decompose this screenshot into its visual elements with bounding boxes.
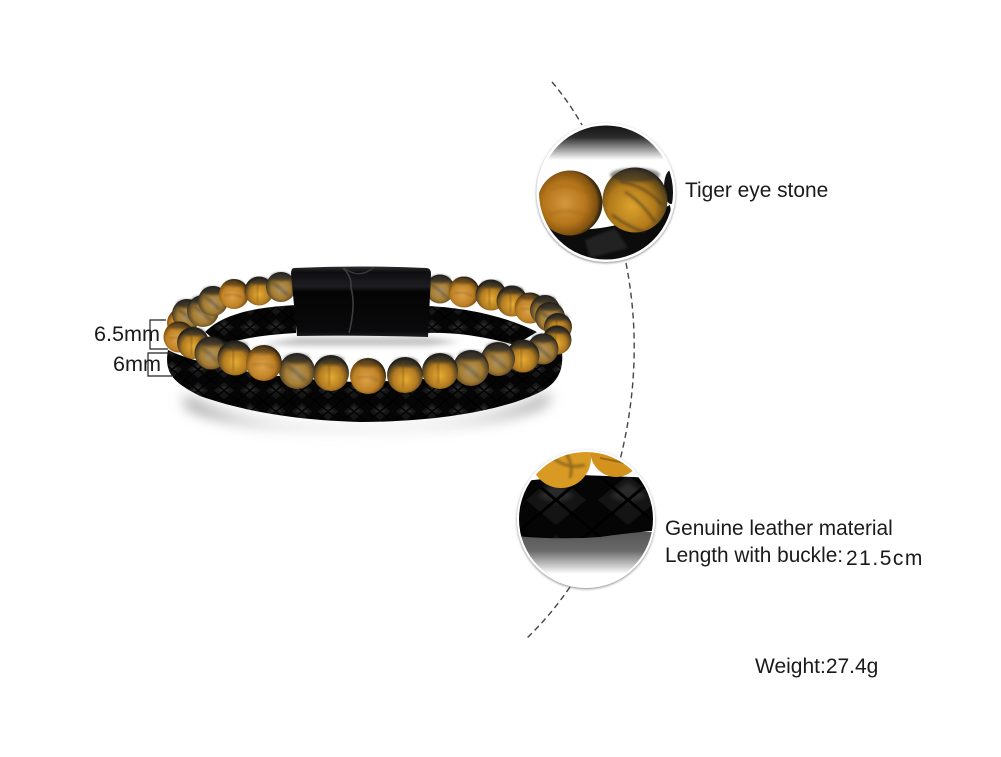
label: leather material and length: Genuine leather material bbox=[665, 517, 893, 540]
dashed arc connecting detail circles bbox=[527, 82, 634, 638]
label: 6mm: 6mm bbox=[113, 351, 161, 376]
label: tiger eye stone: Tiger eye stone bbox=[685, 179, 828, 202]
label: weight: Weight:27.4g bbox=[755, 655, 878, 678]
back row of tiger eye beads bbox=[167, 272, 572, 341]
strap shadow bbox=[185, 337, 550, 429]
label: leather material and length: Length with buckle: bbox=[665, 544, 843, 567]
bracelet photo bbox=[164, 266, 572, 429]
infographic canvas bbox=[95, 82, 921, 678]
detail circle: tiger eye stone bbox=[530, 122, 680, 270]
label: leather material and length: 21.5cm bbox=[846, 547, 924, 570]
front row of tiger eye beads bbox=[164, 322, 572, 394]
upper leather strap bbox=[205, 305, 537, 346]
detail circle: leather bbox=[515, 449, 657, 591]
label: leather material and length bbox=[665, 517, 924, 570]
size brackets bbox=[148, 320, 172, 376]
label: 6.5mm: 6.5mm bbox=[94, 321, 160, 346]
black clasp bbox=[291, 266, 431, 337]
lower leather strap bbox=[167, 350, 562, 422]
